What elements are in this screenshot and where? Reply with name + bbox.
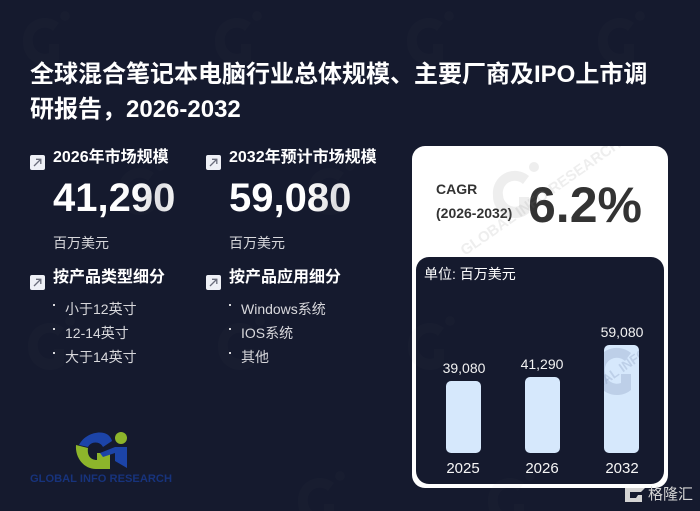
logo: Global Info Research: GLOBAL INFO RESEARCH [30, 473, 172, 485]
bar 2032 [601, 324, 643, 477]
list item: 12-14英寸 [65, 325, 129, 341]
bar 2026: 41,290 [521, 356, 563, 372]
CAGR label: (2026-2032) [436, 205, 512, 221]
bar 2032: 59,080 [601, 324, 643, 340]
panel: 2026 market size [30, 148, 175, 251]
panel: 2032 market size [206, 148, 377, 251]
icon: arrow badge [206, 275, 221, 290]
title: 全球混合笔记本电脑行业总体规模、主要厂商及IPO上市调 [30, 61, 647, 88]
bar 2032: 2032 [605, 460, 639, 477]
heading: 2032年预计市场规模 [229, 149, 377, 166]
unit label: 单位: 百万美元 [424, 266, 516, 282]
panel: by application [206, 268, 341, 365]
CAGR label: CAGR [436, 181, 477, 197]
heading: 按产品应用细分 [229, 269, 341, 286]
unit: 百万美元 [229, 235, 285, 251]
panel: by product type [30, 268, 165, 365]
title: 研报告，2026-2032 [30, 96, 241, 123]
unit: 百万美元 [53, 235, 109, 251]
bar 2026: 2026 [525, 460, 559, 477]
brand name: 格隆汇 [648, 486, 693, 503]
list item: 其他 [241, 349, 269, 365]
list item: Windows系统 [241, 301, 326, 317]
bar chart panel [416, 257, 664, 484]
title [30, 61, 647, 123]
list item: 小于12英寸 [65, 301, 137, 317]
bar 2025 [443, 360, 485, 477]
watermark pattern [462, 146, 639, 395]
value: 59,080 [229, 176, 351, 220]
CAGR label [436, 181, 512, 221]
icon: arrow badge [206, 155, 221, 170]
icon: arrow badge [30, 275, 45, 290]
source badge: 格隆汇 [625, 486, 693, 503]
logo: Global Info Research [30, 432, 172, 485]
icon: G mark [625, 488, 645, 502]
panel: CAGR card [412, 146, 668, 488]
bar 2025: 39,080 [443, 360, 485, 376]
watermark pattern: GLOBAL INFO RESEARCH [458, 136, 624, 259]
heading: 按产品类型细分 [53, 269, 165, 286]
icon: arrow badge [30, 155, 45, 170]
bar 2025: 2025 [446, 460, 480, 477]
list item: 大于14英寸 [65, 349, 137, 365]
list item: IOS系统 [241, 325, 293, 341]
CAGR value: 6.2% [528, 177, 642, 233]
heading: 2026年市场规模 [53, 149, 169, 166]
bar 2026 [520, 356, 563, 477]
value: 41,290 [53, 176, 175, 220]
